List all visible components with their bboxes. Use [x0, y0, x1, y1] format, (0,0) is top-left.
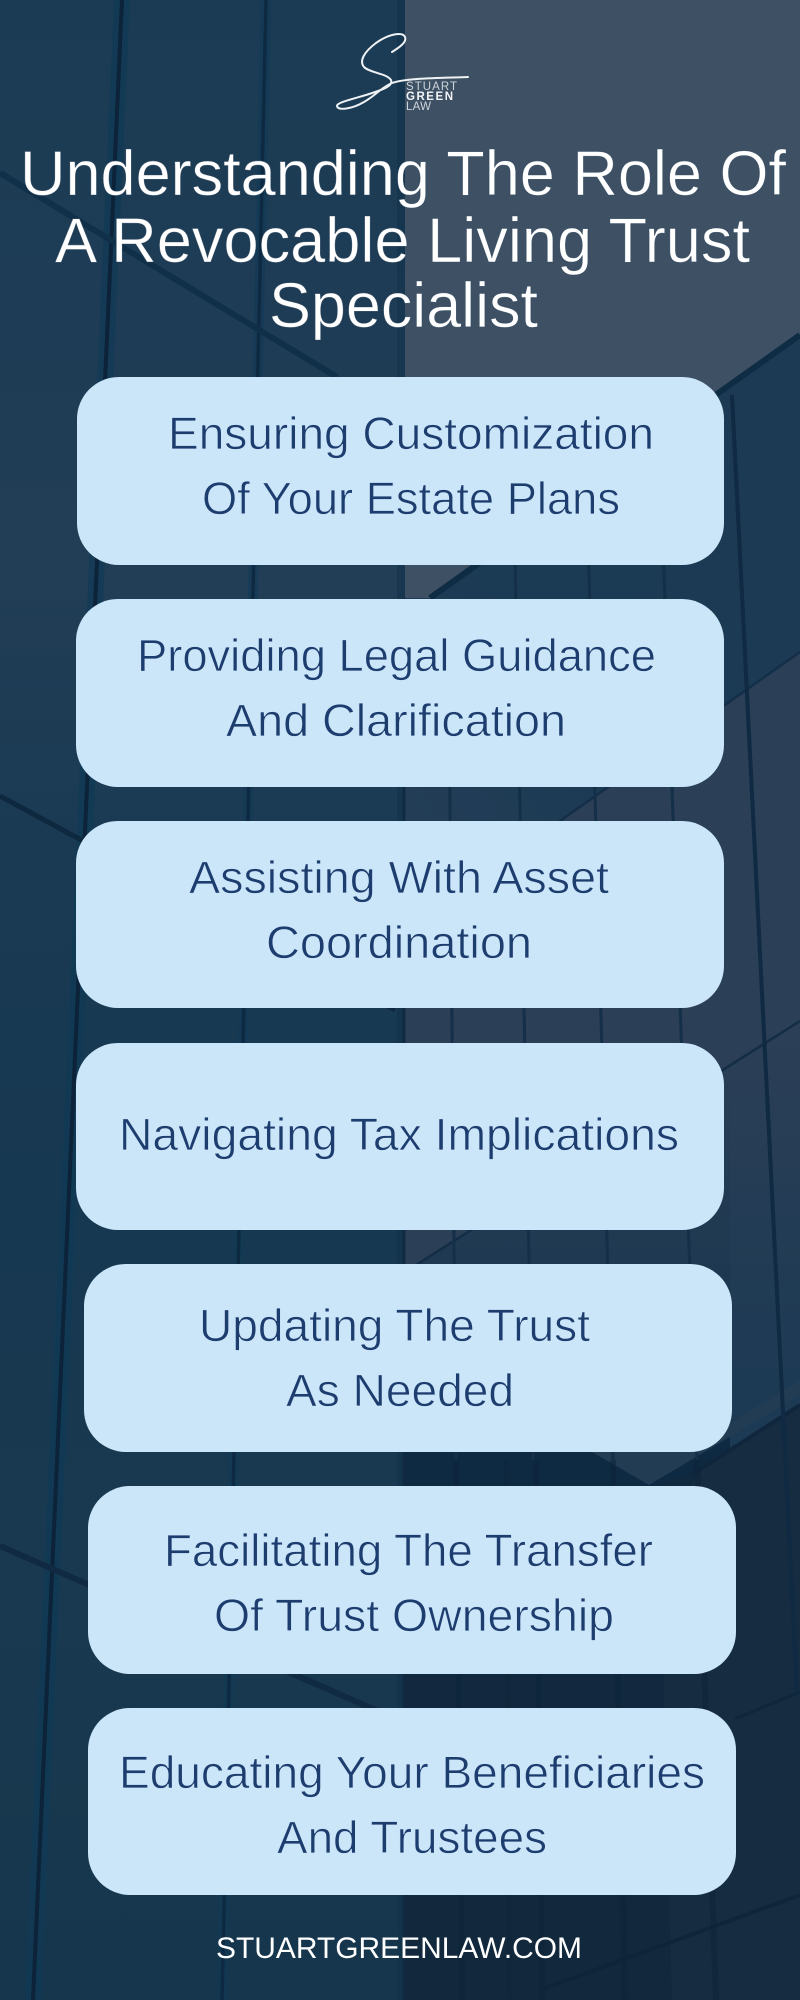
panel: tax implications: Navigating Tax Implications: [119, 1109, 679, 1160]
logo: Stuart Green Law: [337, 34, 468, 113]
logo wordmark: LAW: [406, 101, 431, 113]
panel: educating beneficiaries: And Trustees: [277, 1812, 547, 1863]
panel: ensuring customization: [77, 377, 724, 565]
panel: legal guidance: [76, 599, 724, 787]
panel: educating beneficiaries: [88, 1708, 736, 1895]
panel: asset coordination: Coordination: [266, 917, 532, 968]
title: Understanding The Role Of: [20, 139, 786, 209]
title: Specialist: [269, 271, 538, 341]
panel: asset coordination: Assisting With Asset: [189, 852, 610, 903]
icon: signature S: [337, 34, 468, 109]
panel: updating the trust: [84, 1264, 732, 1452]
panel: transfer of ownership: Facilitating The Transfer: [164, 1525, 653, 1576]
panel: transfer of ownership: [88, 1486, 736, 1674]
panel: legal guidance: Providing Legal Guidance: [137, 630, 656, 681]
logo wordmark: GREEN: [406, 91, 453, 103]
title: [20, 139, 786, 341]
panel: educating beneficiaries: Educating Your Beneficiaries: [119, 1747, 705, 1798]
panel: updating the trust: As Needed: [286, 1365, 514, 1416]
title: A Revocable Living Trust: [55, 206, 750, 276]
logo wordmark: [406, 81, 457, 113]
panel: ensuring customization: Of Your Estate Plans: [202, 473, 620, 524]
panel: asset coordination: [76, 821, 724, 1008]
logo wordmark: STUART: [406, 81, 457, 93]
panel: updating the trust: Updating The Trust: [199, 1300, 591, 1351]
panel: ensuring customization: Ensuring Customization: [168, 408, 654, 459]
footer website: STUARTGREENLAW.COM: [216, 1932, 582, 1965]
panel: tax implications: [76, 1043, 724, 1230]
panel: legal guidance: And Clarification: [226, 695, 566, 746]
panel: transfer of ownership: Of Trust Ownership: [214, 1590, 614, 1641]
